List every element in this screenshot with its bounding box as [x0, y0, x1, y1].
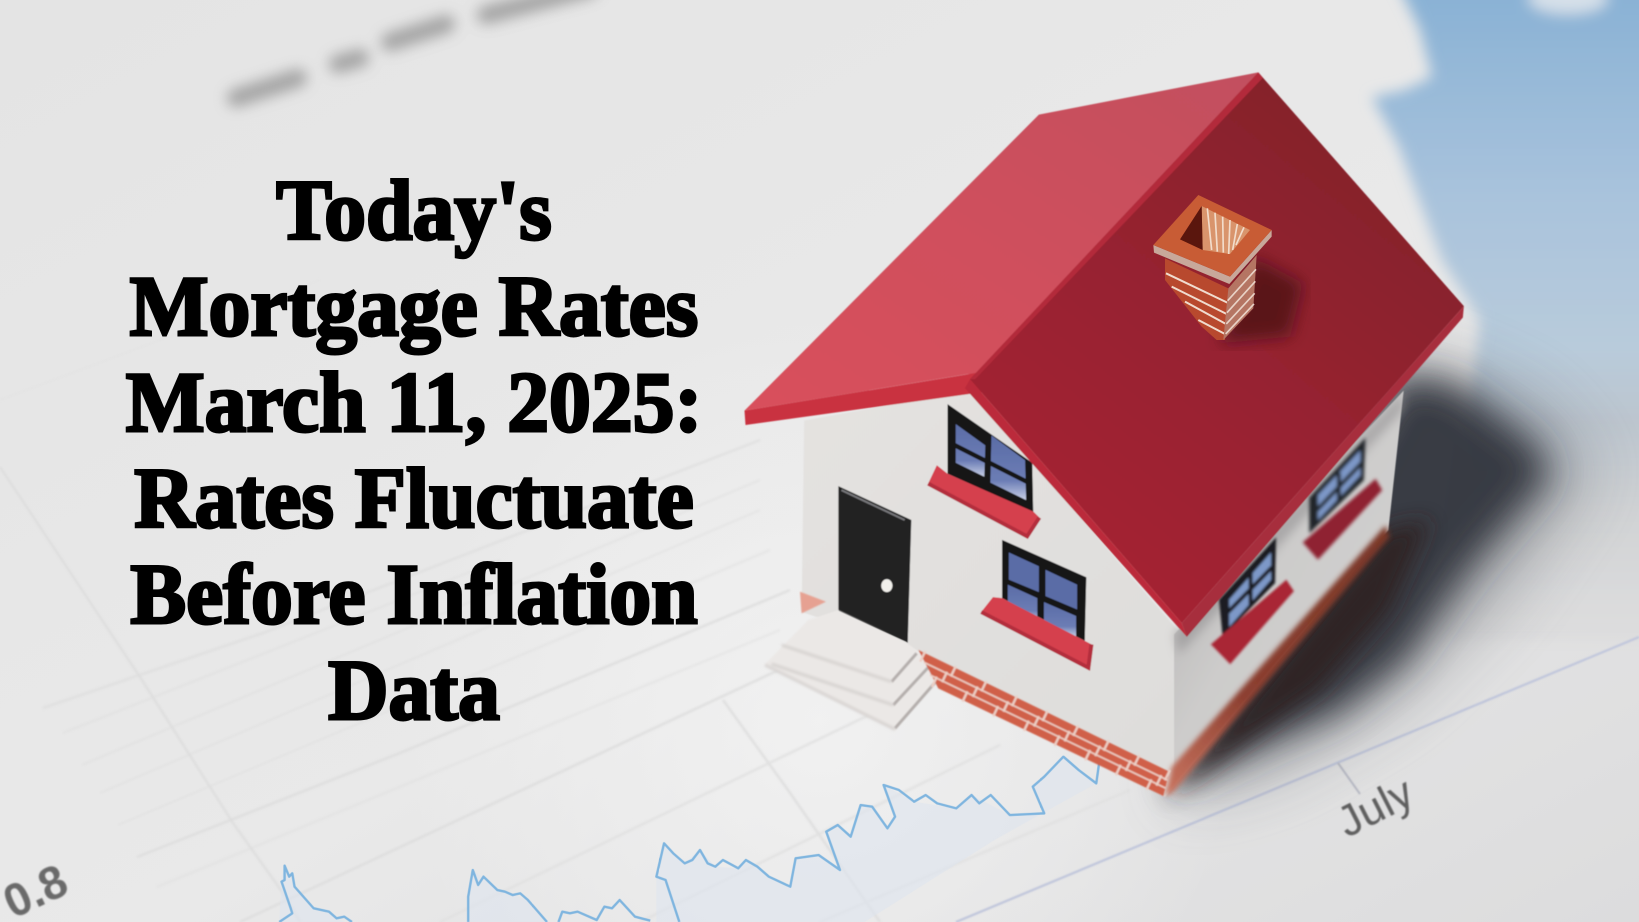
panes [1229, 552, 1271, 627]
front wall [802, 391, 1179, 797]
panes [1318, 450, 1360, 520]
vertical mortar, staggered [922, 656, 1168, 776]
flue dark interior [1180, 206, 1203, 250]
left eave edge [965, 379, 1187, 637]
right wall [1174, 391, 1404, 786]
axis tick [1338, 763, 1360, 794]
soft outer shadow [1170, 345, 1590, 800]
line chart: rate history [279, 757, 1099, 922]
chimney [1153, 195, 1303, 343]
sill [928, 465, 1039, 536]
chimney cap edge [1153, 230, 1272, 284]
title: Rates Fluctuate [134, 450, 694, 546]
title: Today's [276, 162, 552, 258]
roof eave edge [744, 372, 983, 425]
right roof slope [965, 72, 1464, 637]
eave shadow on right wall [1174, 391, 1404, 654]
brick band, front [918, 650, 1169, 796]
blue region of the chart, top right [1372, 0, 1639, 640]
roof surface [744, 72, 1258, 411]
title: Mortgage Rates [130, 258, 698, 354]
flue back wall with stripes [1202, 206, 1250, 254]
band [918, 650, 1169, 796]
title: Data [328, 642, 500, 738]
horizontal mortar [924, 662, 1167, 788]
chimney shadow [1220, 257, 1303, 343]
right wall window, near [1211, 537, 1294, 664]
main shadow [1170, 375, 1550, 790]
right wall window, far [1303, 438, 1382, 560]
right brick face [1223, 255, 1257, 340]
title: Before Inflation [130, 546, 698, 642]
brick base, right side [1165, 525, 1389, 797]
mullions [1228, 567, 1272, 612]
lower front window [981, 540, 1091, 668]
frame [1309, 438, 1365, 533]
sill [1211, 580, 1294, 664]
chart area fill [279, 757, 1096, 922]
step surfaces [765, 610, 938, 731]
ridge highlight [970, 72, 1263, 379]
step edges [765, 645, 895, 729]
axis label: July: July [1329, 768, 1421, 847]
left brick mortar [1166, 273, 1227, 334]
mullions [952, 444, 1029, 483]
roof surface [970, 72, 1464, 623]
door panel [838, 486, 911, 643]
dark contact shadow [1165, 520, 1430, 800]
chart line [279, 757, 1099, 922]
left brick face [1165, 258, 1228, 340]
bottom eave edge [1182, 306, 1464, 637]
cast shadow of the house [1165, 345, 1590, 800]
right brick mortar [1226, 269, 1256, 334]
steps [765, 610, 938, 731]
frame [1219, 537, 1276, 637]
sill [981, 597, 1091, 668]
front steps and brick base [765, 592, 1169, 796]
frame [948, 404, 1033, 513]
frame [1002, 540, 1086, 641]
chimney cap top [1153, 195, 1272, 277]
title: March 11, 2025: [126, 354, 702, 450]
house model [744, 72, 1464, 797]
flue stripes [1207, 208, 1244, 254]
door top highlight [841, 490, 905, 520]
sill [1303, 479, 1382, 560]
panes [956, 424, 985, 477]
title [126, 162, 702, 738]
left roof slope [744, 72, 1258, 425]
chart axis [956, 637, 1639, 922]
mullions [1317, 463, 1362, 510]
panes [1009, 552, 1039, 592]
door [838, 486, 911, 643]
step risers [892, 653, 937, 728]
blurred heading on the chart paper [236, 0, 590, 98]
brick corner, left side [800, 592, 826, 613]
door knob [881, 579, 892, 592]
chart grid lines [0, 280, 1130, 922]
upper front window [928, 404, 1039, 536]
